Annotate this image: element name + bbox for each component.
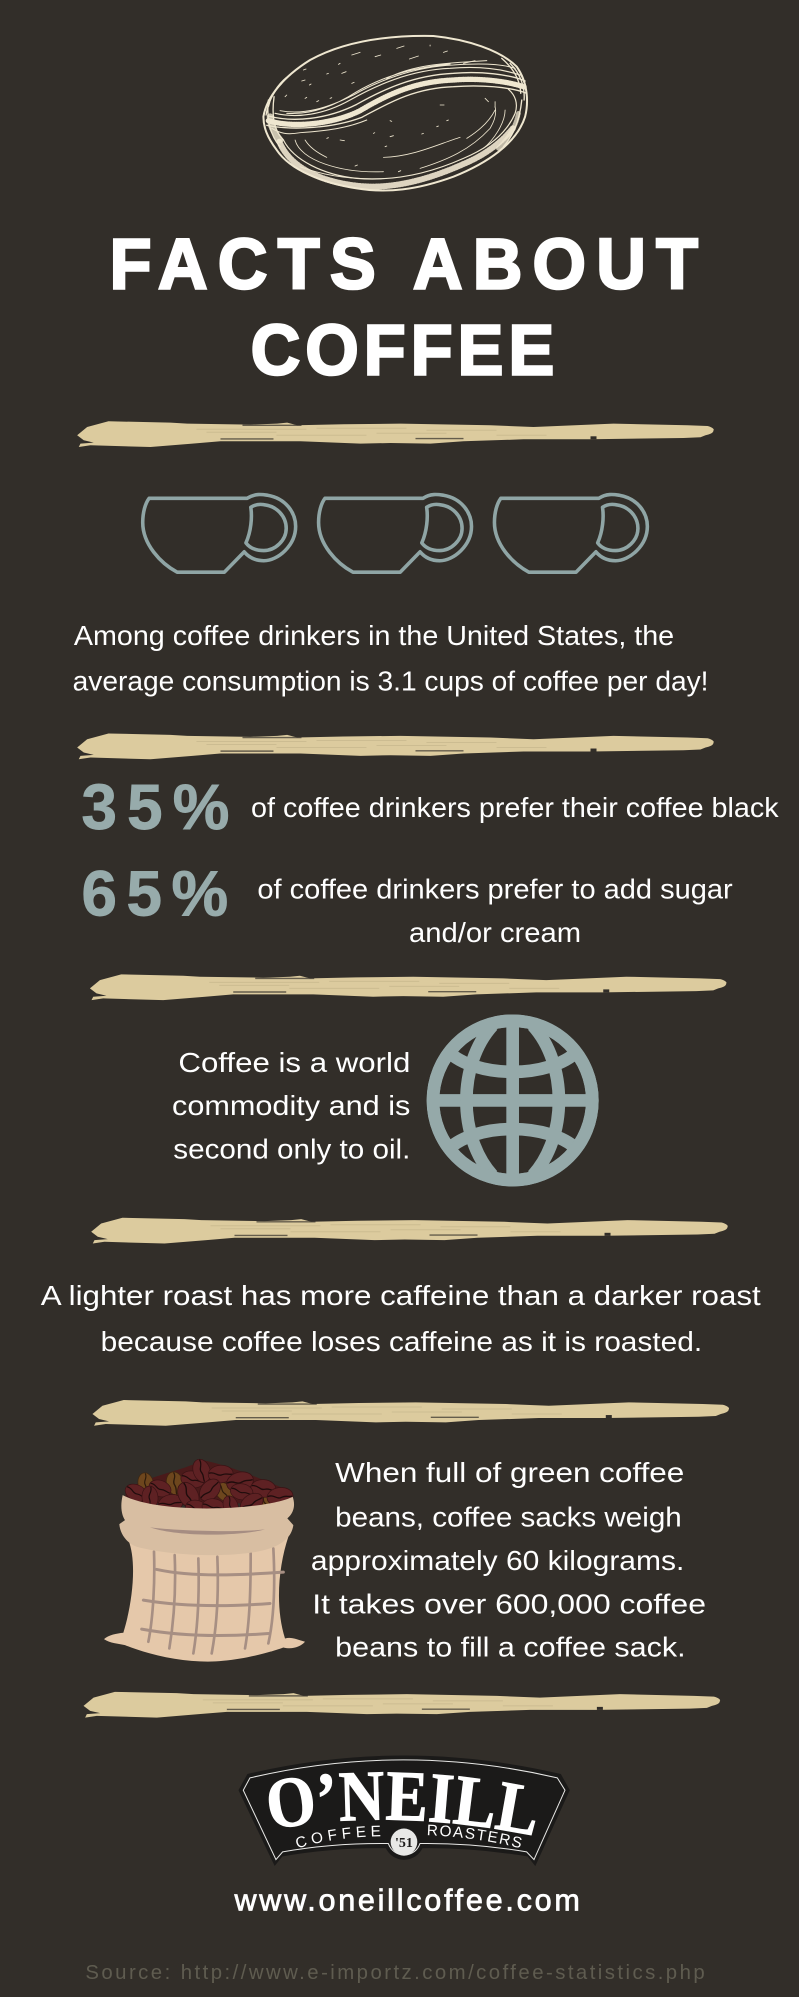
stat: 65 percent sugar and cream [82,858,733,948]
sack weave [142,1548,283,1653]
stat: 35 percent black: 35% [82,771,229,843]
divider: brush stroke 6 [84,1692,720,1718]
text: world commodity [172,1047,410,1164]
divider: brush stroke 3 [90,974,727,1000]
source line: Source: http://www.e-importz.com/coffee-statistics.php [85,1962,705,1984]
title [110,224,698,390]
divider: brush stroke 5 [92,1400,729,1426]
text: world commodity: Coffee is a world [178,1047,410,1078]
icon: sack of coffee beans [104,1457,305,1662]
text: lighter roast: because coffee loses caffeine as it is roasted. [101,1326,702,1357]
logo: O'Neill Coffee Roasters: O’NEILL [268,1772,536,1836]
text: average consumption [73,620,709,697]
sack collar [119,1495,294,1555]
coffee beans in sack [122,1457,294,1519]
divider: brush stroke 1 [77,421,714,447]
logo: O'Neill Coffee Roasters: ROASTERS [428,1824,522,1848]
text: world commodity: second only to oil. [173,1133,410,1164]
text: coffee sack weight: When full of green coffee [335,1457,684,1488]
sack body [104,1537,305,1662]
text: coffee sack weight: It takes over 600,000 coffee [312,1588,706,1619]
divider: brush stroke 2 [77,734,714,759]
stat: 65 percent sugar and cream: of coffee drinkers prefer to add sugar [257,873,733,904]
text: average consumption: average consumption is 3.1 cups of coffee per day! [73,666,709,697]
text: coffee sack weight: beans to fill a coffee sack. [335,1632,686,1663]
website url: www.oneillcoffee.com [233,1883,580,1917]
divider: brush stroke 4 [91,1218,728,1244]
text: coffee sack weight: beans, coffee sacks weigh [335,1502,682,1533]
text: coffee sack weight: approximately 60 kilograms. [311,1545,684,1576]
title: FACTS ABOUT [110,224,698,304]
title: COFFEE [251,310,554,390]
stat: 65 percent sugar and cream: 65% [82,858,228,930]
text: average consumption: Among coffee drinkers in the United States, the [74,620,674,651]
icon: three coffee cups [143,495,647,572]
stat: 65 percent sugar and cream: and/or cream [409,917,581,948]
stat: 35 percent black: of coffee drinkers prefer their coffee black [251,792,780,823]
text: lighter roast [41,1280,761,1357]
stat: 35 percent black [82,771,780,843]
text: coffee sack weight [311,1457,706,1663]
logo: O'Neill Coffee Roasters: COFFEE [296,1826,380,1848]
icon: coffee bean sketch [263,36,527,191]
logo: O'Neill Coffee Roasters: '51 [395,1836,413,1851]
text: world commodity: commodity and is [172,1090,410,1121]
text: lighter roast: A lighter roast has more caffeine than a darker roast [41,1280,761,1311]
icon: globe [427,1014,599,1186]
